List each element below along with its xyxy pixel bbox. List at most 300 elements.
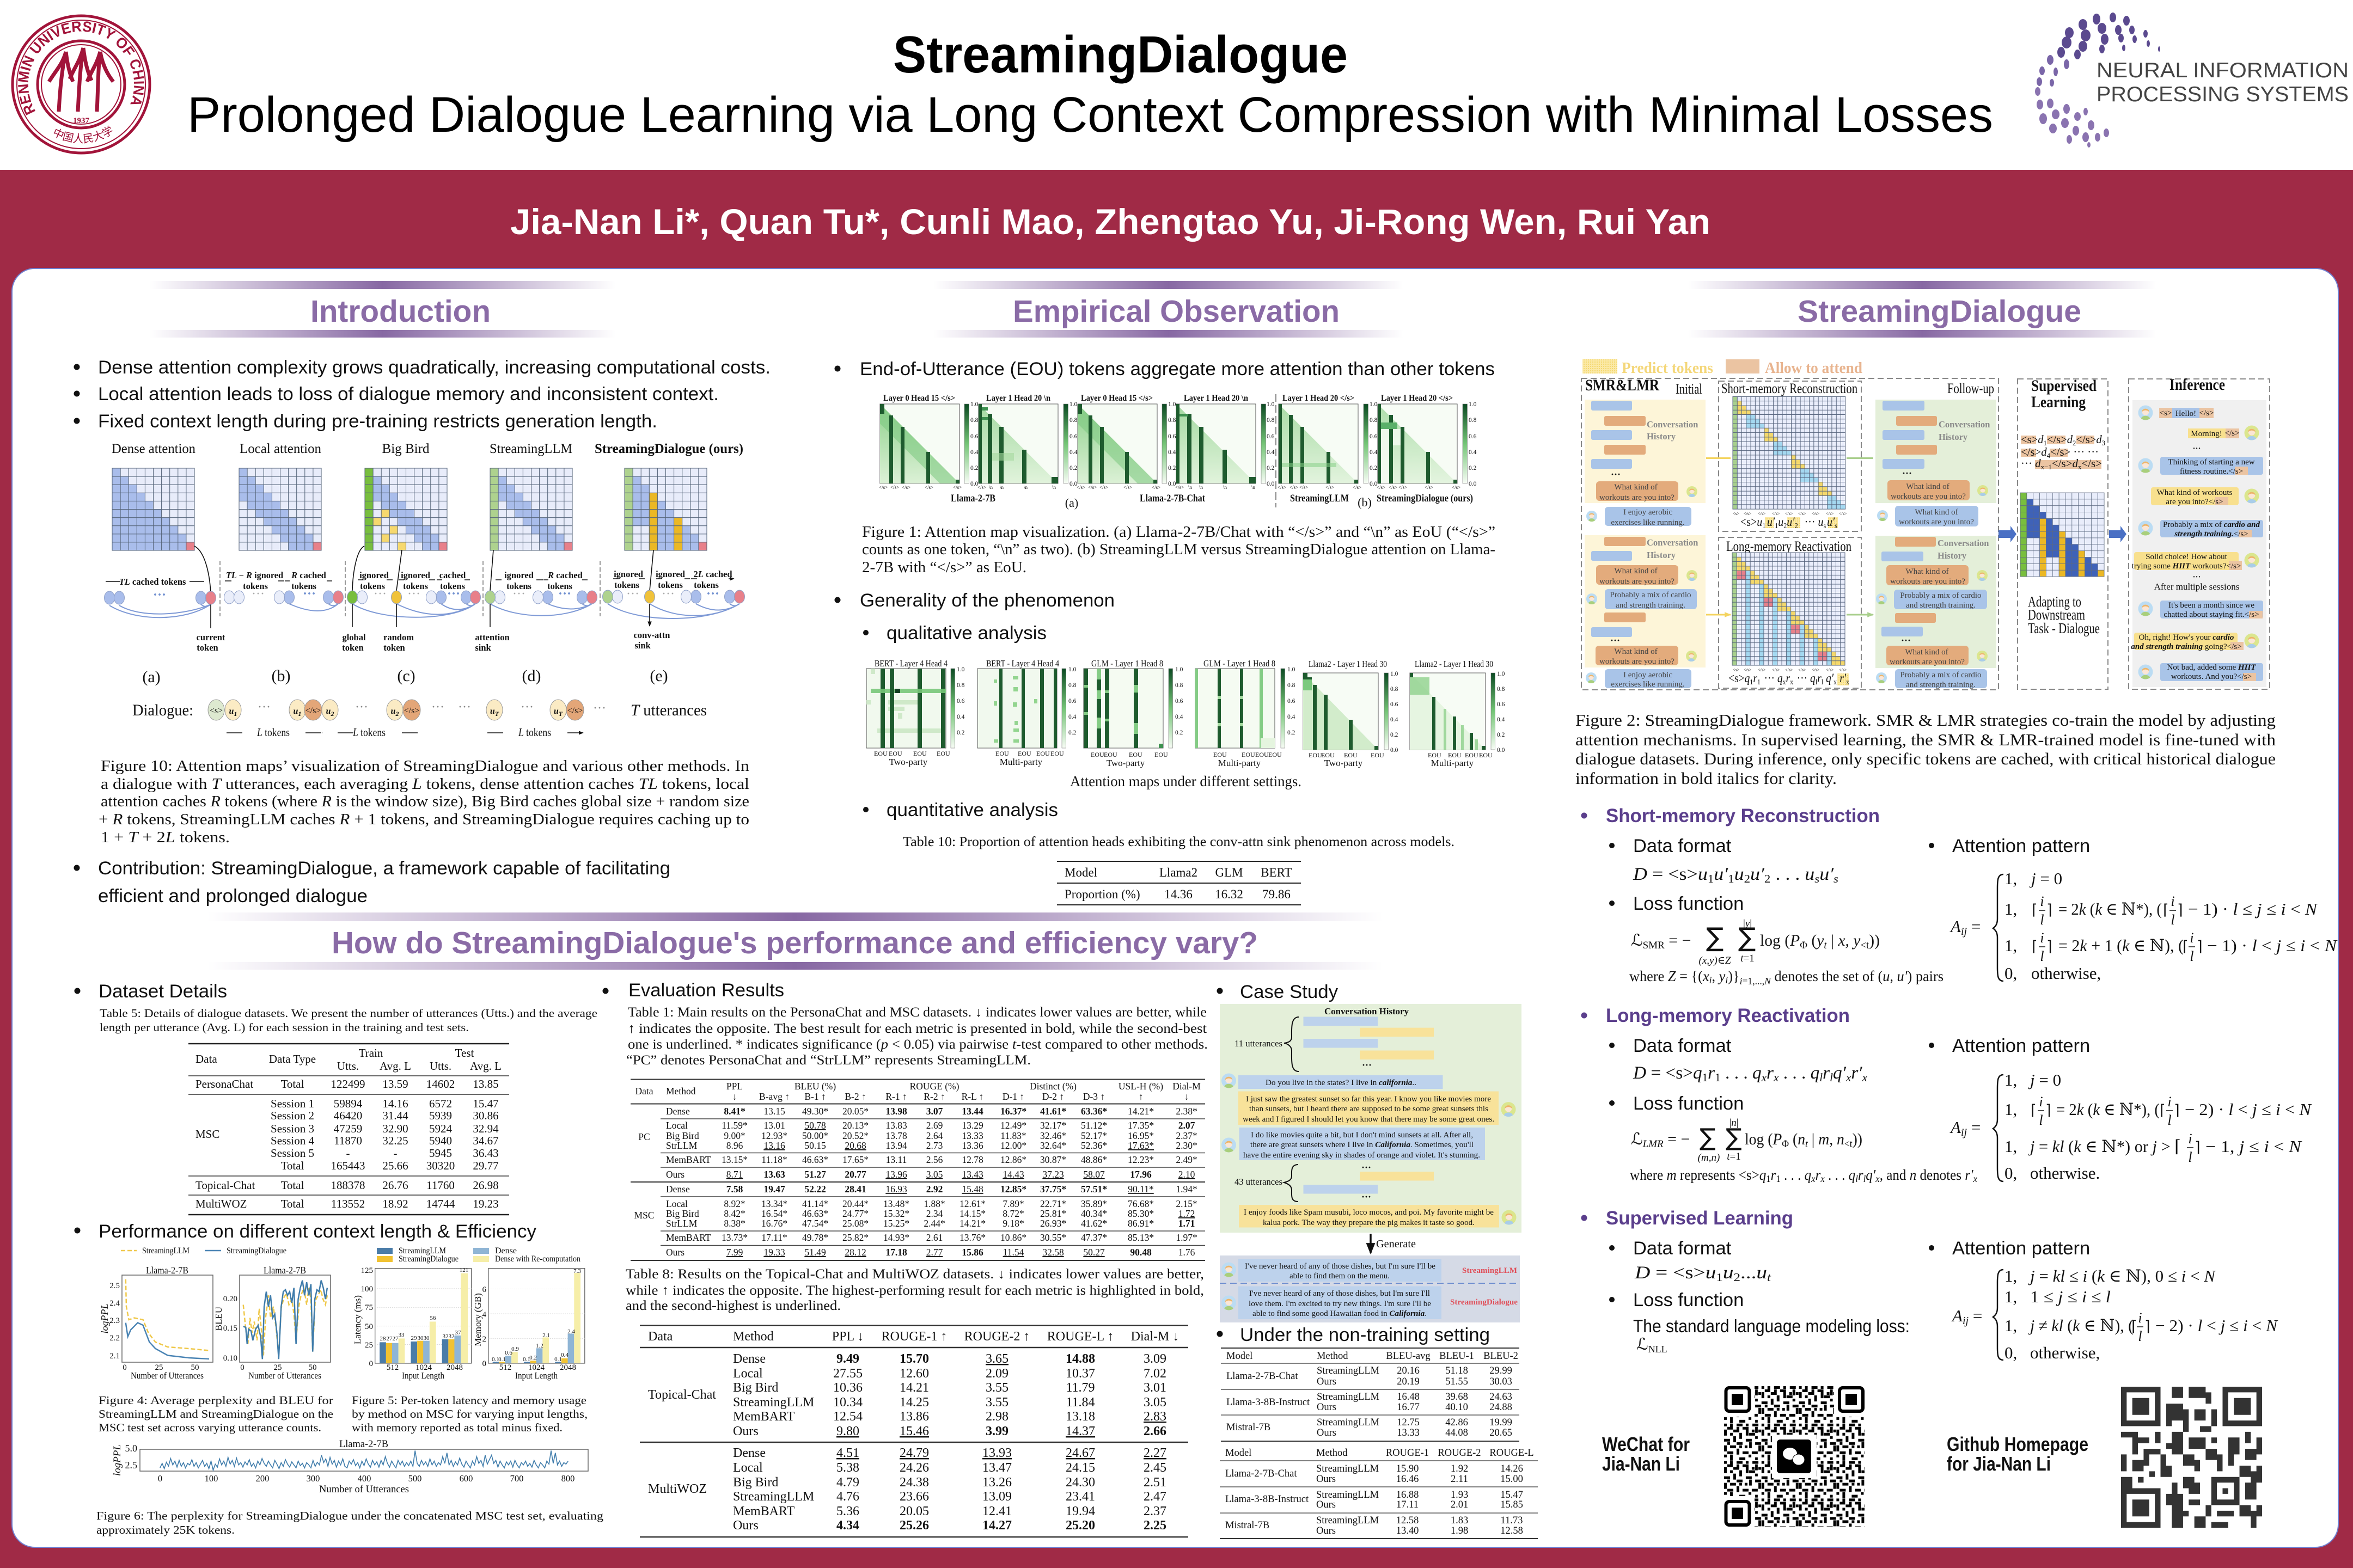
table 10: Table 10: Proportion of attention heads exhibiting the conv-attn sink phenomenon across models. bbox=[903, 835, 1454, 849]
colorbar ticks: 0.0 bbox=[970, 481, 979, 487]
bar chart: memory: 0.1 bbox=[554, 1356, 562, 1363]
EOU tick labels: \n bbox=[1052, 485, 1056, 490]
section: supervised learning bbox=[1581, 1208, 2278, 1362]
follow-up history panels: workouts are you into? bbox=[1891, 492, 1966, 501]
token labels: tokens bbox=[243, 581, 268, 591]
conversation history panel: there are great sunsets where I live in California. Sometimes, you'll bbox=[1250, 1141, 1474, 1149]
colorbar ticks: 0.4 bbox=[1168, 449, 1176, 456]
bullet: generality: qualitative analysis bbox=[887, 623, 1047, 644]
dialogue row: </s> bbox=[404, 706, 419, 715]
table 1: 51.27 bbox=[804, 1169, 826, 1180]
line chart: logPPL: 25 bbox=[155, 1363, 163, 1372]
dialogue row: ··· bbox=[355, 700, 368, 714]
table 1: 12.61* bbox=[959, 1198, 986, 1209]
table 8: 4.51 bbox=[836, 1446, 859, 1460]
colorbar ticks: 0.0 bbox=[1497, 747, 1505, 754]
table 1: 8.41* bbox=[724, 1106, 745, 1117]
attention arcs bbox=[109, 604, 739, 618]
colorbars bbox=[964, 404, 1467, 483]
conversation history panel: have the entire evening sky in shades of orange and violet. It's stunning. bbox=[1243, 1151, 1480, 1160]
table 1: D-1 ↑ bbox=[1003, 1091, 1024, 1102]
table 8 caption: Table 8: Results on the Topical-Chat and MultiWOZ datasets. ↓ indicates lower values are better, bbox=[626, 1267, 1204, 1282]
legend: Predict tokens bbox=[1622, 359, 1713, 377]
colorbar ticks: 0.2 bbox=[1069, 465, 1078, 471]
SMR loss formula: ∑ bbox=[1738, 922, 1756, 953]
ROUGE table: 15.47 bbox=[1500, 1490, 1523, 1500]
dialogue row: 1 bbox=[234, 710, 237, 718]
section: short-memory reconstruction: 1 bbox=[1708, 872, 1714, 885]
LMR attention pattern: i bbox=[2188, 1131, 2192, 1147]
table 5: 165443 bbox=[331, 1159, 365, 1172]
table 1: 13.29 bbox=[962, 1120, 983, 1131]
supervised learning panel: 2 bbox=[2073, 439, 2076, 447]
ROUGE table: Ours bbox=[1316, 1499, 1336, 1510]
token labels: sink bbox=[634, 640, 651, 651]
table 1: D-3 ↑ bbox=[1083, 1091, 1105, 1102]
bar chart: memory: 1024 bbox=[528, 1363, 545, 1372]
heatmap titles: Layer 0 Head 15 </s> bbox=[1081, 394, 1153, 403]
table 1: Dial-M bbox=[1172, 1081, 1201, 1092]
SMR attention pattern: − 1) · l < j ≤ i < N bbox=[2207, 936, 2338, 955]
table 10: Model bbox=[1065, 866, 1097, 879]
supervised attention pattern: i bbox=[2138, 1310, 2142, 1326]
follow-up history panels: Probably a mix of cardio bbox=[1900, 671, 1982, 679]
figure 1 sublabels: StreamingDialogue (ours) bbox=[1377, 493, 1473, 504]
line chart: perplexity over 800 utterances: 300 bbox=[307, 1473, 320, 1484]
table 1: 13.83 bbox=[885, 1120, 907, 1131]
short-memory reconstruction grid: </s> bbox=[1826, 511, 1834, 516]
colorbar ticks: 0.4 bbox=[1287, 714, 1295, 720]
bar chart: memory: 6 bbox=[482, 1285, 487, 1294]
ROUGE table: StreamingLLM bbox=[1316, 1463, 1379, 1474]
table 1: 1.94* bbox=[1176, 1184, 1197, 1195]
EOU tick labels: </s> bbox=[1425, 485, 1433, 490]
section: long-memory reactivation: l bbox=[1819, 1071, 1823, 1084]
table 1: 13.48* bbox=[883, 1198, 909, 1209]
colorbar ticks: 0.0 bbox=[1267, 481, 1275, 487]
long-memory reactivation grid: x bbox=[1783, 678, 1786, 687]
LMR attention pattern: l bbox=[2039, 1112, 2043, 1128]
LMR loss formula: (m,n) bbox=[1698, 1152, 1720, 1163]
table 1: MemBART bbox=[666, 1154, 711, 1165]
ROUGE table: 2.11 bbox=[1451, 1474, 1468, 1485]
BLEU table: 13.33 bbox=[1397, 1428, 1420, 1438]
table 1: 2.44* bbox=[924, 1218, 945, 1229]
EOU labels: EOU bbox=[1036, 750, 1050, 757]
long-memory reactivation grid: ··· bbox=[1794, 671, 1810, 685]
table 8: 14.21 bbox=[900, 1381, 929, 1395]
table 1: 2.77 bbox=[926, 1247, 943, 1258]
bar chart: memory: 0.1 bbox=[492, 1356, 499, 1363]
token labels bbox=[119, 569, 732, 653]
table 1: Dense bbox=[666, 1184, 690, 1195]
party labels: Two-party bbox=[889, 757, 928, 767]
table 1: Local bbox=[666, 1198, 688, 1209]
supervised learning panel: x bbox=[2078, 463, 2082, 471]
BLEU table: Llama-3-8B-Instruct bbox=[1226, 1397, 1310, 1408]
table 1: 20.13* bbox=[842, 1120, 869, 1131]
legend: figure 4: StreamingDialogue bbox=[227, 1246, 286, 1255]
SMR loss formula: <t bbox=[1860, 940, 1869, 951]
token dots bbox=[153, 587, 719, 602]
NeurIPS logo: PROCESSING SYSTEMS bbox=[2097, 83, 2349, 106]
section: short-memory reconstruction: Short-memory Reconstruction bbox=[1606, 805, 1880, 826]
conversation history panel: Do you live in the states? I live in california.. bbox=[1266, 1079, 1416, 1087]
token dots: ··· bbox=[626, 587, 639, 601]
table 5: 26.76 bbox=[382, 1179, 408, 1192]
colorbar ticks: 1.0 bbox=[1497, 671, 1505, 677]
EOU labels: EOU bbox=[1018, 750, 1031, 757]
ROUGE table: Mistral-7B bbox=[1225, 1520, 1269, 1531]
bar chart: latency: Latency (ms) bbox=[352, 1295, 363, 1344]
short-memory reconstruction grid: </s> bbox=[1798, 511, 1806, 516]
line chart: logPPL: Number of Utterances bbox=[131, 1370, 204, 1381]
EOU labels: EOU bbox=[1104, 751, 1117, 758]
initial history panels bbox=[1585, 400, 1706, 689]
supervised learning panel: Adapting to bbox=[2028, 593, 2081, 610]
short-memory reconstruction grid: 1 bbox=[1762, 522, 1765, 530]
line chart: perplexity over 800 utterances: 200 bbox=[256, 1473, 269, 1484]
grid e bbox=[625, 468, 707, 550]
table 5: 29.77 bbox=[473, 1159, 499, 1172]
table 1: 16.76* bbox=[761, 1218, 787, 1229]
SMR attention pattern: l bbox=[2040, 948, 2044, 964]
table 1: 13.98 bbox=[885, 1106, 907, 1117]
line chart: BLEU: BLEU bbox=[213, 1307, 224, 1331]
colorbar ticks: 0.8 bbox=[1175, 682, 1183, 689]
table 1 bbox=[631, 1079, 1205, 1260]
table 1: 2.56 bbox=[926, 1154, 943, 1165]
SMR attention pattern: i bbox=[2190, 930, 2194, 946]
table 5: Session 2 bbox=[271, 1109, 314, 1122]
table 10: 79.86 bbox=[1262, 887, 1291, 901]
section: short-memory reconstruction: 2 bbox=[1764, 872, 1770, 885]
caption: figure 4 bbox=[99, 1394, 333, 1434]
colorbar ticks bbox=[970, 401, 1477, 487]
bar chart: memory: 0.1 bbox=[498, 1356, 506, 1363]
table 8: 3.09 bbox=[1144, 1352, 1166, 1366]
long-memory reactivation grid: x bbox=[1846, 678, 1849, 687]
table 1: 20.77 bbox=[845, 1169, 866, 1180]
section: supervised learning: Attention pattern bbox=[1952, 1238, 2090, 1259]
table 1: 32.58 bbox=[1042, 1247, 1064, 1258]
dialogue row: 2 bbox=[395, 710, 399, 718]
table 5: Total bbox=[281, 1179, 304, 1192]
heading: StreamingDialogue bbox=[1688, 281, 2156, 338]
frame headings: Follow-up bbox=[1947, 381, 1994, 396]
line chart: perplexity over 800 utterances: 600 bbox=[460, 1473, 473, 1484]
SMR loss formula: )) bbox=[1869, 932, 1880, 950]
section: long-memory reactivation: l bbox=[1863, 1173, 1866, 1184]
BLEU table: Method bbox=[1317, 1351, 1348, 1362]
LMR loss formula: )) bbox=[1853, 1130, 1862, 1148]
inference panel bbox=[2131, 376, 2266, 687]
EOU tick labels: \n bbox=[1251, 485, 1256, 490]
follow-up history panels: What kind of bbox=[1905, 567, 1949, 576]
table 8: ROUGE-1 ↑ bbox=[882, 1330, 947, 1344]
supervised attention pattern: A bbox=[1951, 1306, 1963, 1325]
table 8: 2.27 bbox=[1144, 1446, 1166, 1460]
frame headings: SMR&LMR bbox=[1585, 376, 1659, 394]
bar chart: memory: 2.1 bbox=[542, 1332, 550, 1339]
table 1: 20.68 bbox=[845, 1140, 866, 1151]
colorbar ticks: 0.2 bbox=[1068, 730, 1077, 736]
EOU tick labels: </s> bbox=[1099, 485, 1108, 490]
bar chart: latency: 75 bbox=[365, 1303, 373, 1312]
BLEU table: 24.63 bbox=[1489, 1392, 1512, 1402]
Github label bbox=[1947, 1433, 2088, 1475]
EOU labels: EOU bbox=[1479, 751, 1493, 759]
table 1: B-2 ↑ bbox=[845, 1091, 866, 1102]
table 1: 16.54* bbox=[761, 1208, 787, 1219]
EOU labels: EOU bbox=[1309, 751, 1322, 759]
colorbar ticks: 0.4 bbox=[1497, 716, 1505, 723]
colorbar ticks: 0.8 bbox=[1068, 682, 1077, 689]
EOU labels: EOU bbox=[1448, 751, 1462, 759]
initial history panels: I enjoy aerobic bbox=[1623, 671, 1672, 679]
Llama2 two-party bbox=[1303, 673, 1378, 750]
colorbar ticks: 0.8 bbox=[1469, 417, 1477, 424]
SMR attention pattern: = 2k + 1 (k ∈ ℕ), ( bbox=[2058, 936, 2184, 955]
figure 1 sublabels: StreamingLLM bbox=[1290, 493, 1349, 504]
separators bbox=[220, 561, 600, 616]
caption: figure 4: Figure 4: Average perplexity and BLEU for bbox=[99, 1394, 333, 1407]
BLEU table: 16.77 bbox=[1397, 1402, 1420, 1413]
table 10: BERT bbox=[1261, 866, 1292, 879]
short-memory reconstruction grid: u′ bbox=[1827, 515, 1835, 529]
follow-up history panels: What kind of bbox=[1906, 482, 1949, 491]
section: supervised learning: D = <s> u bbox=[1635, 1263, 1714, 1283]
table 8: 11.79 bbox=[1066, 1381, 1095, 1395]
EOU labels: EOU bbox=[1255, 751, 1269, 758]
line chart: logPPL: logPPL bbox=[99, 1303, 110, 1334]
table 5: Total bbox=[281, 1077, 304, 1091]
ROUGE table: 15.00 bbox=[1500, 1474, 1523, 1485]
section: long-memory reactivation: x bbox=[1845, 1071, 1851, 1084]
colorbars bbox=[951, 669, 1495, 750]
dialogue row: ··· bbox=[521, 700, 534, 714]
ROUGE table: 12.58 bbox=[1396, 1515, 1419, 1526]
table 1: Method bbox=[666, 1086, 696, 1097]
BLEU table: Ours bbox=[1317, 1428, 1336, 1438]
short-memory reconstruction grid: </s> bbox=[1772, 511, 1780, 516]
line chart: BLEU: Number of Utterances bbox=[248, 1370, 321, 1381]
LMR attention pattern: 1, bbox=[2004, 1100, 2017, 1119]
section: long-memory reactivation: x bbox=[1811, 1173, 1816, 1184]
table 1: 16.93 bbox=[885, 1184, 907, 1195]
EOU tick labels: </s> bbox=[879, 485, 888, 490]
LMR loss formula: <t bbox=[1844, 1138, 1853, 1150]
line chart: BLEU: 0.20 bbox=[223, 1295, 237, 1303]
bar chart: latency: 0 bbox=[369, 1359, 373, 1368]
dialogue row: 2 bbox=[330, 710, 334, 718]
EOU tick labels: \n bbox=[1000, 485, 1004, 490]
line chart: logPPL: 2.5 bbox=[109, 1282, 120, 1290]
SMR attention pattern: i bbox=[2171, 893, 2175, 909]
long-memory reactivation grid: </s> bbox=[1839, 667, 1847, 672]
follow-up history panels: ··· bbox=[1901, 635, 1911, 646]
EOU tick labels: </s> bbox=[1289, 485, 1298, 490]
EOU tick labels: </s> bbox=[902, 485, 910, 490]
method labels bbox=[112, 442, 743, 456]
table 1: 63.36* bbox=[1081, 1106, 1107, 1117]
table 1: 15.32* bbox=[883, 1208, 909, 1219]
generated responses panel: love them. I'm excited to try new things. I'm sure I'll be bbox=[1249, 1300, 1431, 1308]
case labels: (b) bbox=[272, 667, 290, 685]
short-memory reconstruction grid: 2 bbox=[1783, 522, 1787, 530]
heatmap d bbox=[1176, 404, 1256, 483]
token labels: tokens bbox=[440, 581, 465, 591]
colorbar ticks: 1.0 bbox=[1175, 666, 1183, 673]
table 8: 5.38 bbox=[836, 1461, 859, 1475]
party labels: Two-party bbox=[1324, 758, 1363, 768]
bar chart: latency: 37 bbox=[455, 1330, 461, 1336]
table 5: 13.59 bbox=[382, 1077, 408, 1091]
table 1: 28.12 bbox=[845, 1247, 866, 1258]
table 1: 48.86* bbox=[1081, 1154, 1107, 1165]
section: supervised learning: Data format bbox=[1633, 1238, 1732, 1259]
table 8: 13.09 bbox=[982, 1490, 1012, 1504]
supervised learning panel: <s>d bbox=[2021, 433, 2044, 446]
table 1: 12.49* bbox=[1000, 1120, 1026, 1131]
table 1: 15.86 bbox=[962, 1247, 983, 1258]
colorbar ticks: 0.8 bbox=[1069, 417, 1078, 424]
long-memory reactivation grid: l bbox=[1822, 678, 1823, 687]
inference bubbles: <s> bbox=[2160, 409, 2172, 418]
colorbar ticks: 0.8 bbox=[970, 417, 979, 424]
heatmap titles: Layer 1 Head 20 </s> bbox=[1381, 394, 1453, 403]
LMR loss formula: | bbox=[1808, 1130, 1818, 1148]
line chart: perplexity over 800 utterances: Number of Utterances bbox=[319, 1484, 409, 1495]
table 1: 13.76* bbox=[959, 1232, 986, 1243]
dialogue row: L tokens bbox=[352, 726, 386, 739]
bar chart: latency: 1024 bbox=[415, 1363, 432, 1372]
table 8: Dense bbox=[733, 1446, 766, 1460]
token labels: tokens bbox=[403, 581, 428, 591]
SMR loss formula: log (P bbox=[1760, 932, 1800, 950]
dialogue row: u bbox=[391, 707, 395, 716]
dialogue row: Dialogue: bbox=[132, 701, 193, 719]
short-memory reconstruction grid bbox=[1733, 396, 1847, 530]
panel: introduction bullets: Fixed context length during pre-training restricts generation length. bbox=[98, 411, 657, 432]
dialogue row: <s> bbox=[210, 706, 223, 715]
ROUGE table: 2.01 bbox=[1451, 1499, 1468, 1510]
line chart: perplexity over 800 utterances: 500 bbox=[408, 1473, 421, 1484]
table 5: Data Type bbox=[269, 1052, 316, 1065]
table 1: 16.37* bbox=[1000, 1106, 1026, 1117]
line chart: perplexity over 800 utterances: 2.5 bbox=[125, 1460, 137, 1471]
token labels: TL cached tokens bbox=[119, 577, 186, 587]
section: short-memory reconstruction: u, u′) pairs bbox=[1883, 968, 1945, 984]
table 1: 15.48 bbox=[962, 1184, 983, 1195]
table 1: 2.15* bbox=[1176, 1198, 1197, 1209]
caption: figure 10 bbox=[99, 757, 750, 846]
dialogue row: 1 bbox=[298, 710, 301, 718]
table 8: 3.55 bbox=[986, 1381, 1009, 1395]
bar chart: memory: 0.6 bbox=[505, 1350, 512, 1356]
table 1: 14.21* bbox=[1128, 1106, 1154, 1117]
EOU labels: EOU bbox=[874, 750, 888, 757]
bar chart: latency: 30 bbox=[417, 1335, 424, 1342]
bar chart: latency: 29 bbox=[411, 1335, 417, 1342]
supervised learning panel: </s> bbox=[2081, 457, 2102, 470]
supervised attention pattern: l bbox=[2138, 1328, 2142, 1344]
long-memory reactivation grid: ··· bbox=[1762, 671, 1777, 685]
table 1: 7.99 bbox=[726, 1247, 743, 1258]
inference panel: Inference bbox=[2169, 376, 2225, 394]
table 8: 2.51 bbox=[1144, 1475, 1166, 1490]
section: long-memory reactivation: q bbox=[1805, 1167, 1811, 1183]
table 5: 30320 bbox=[426, 1159, 455, 1172]
heatmap c bbox=[1078, 404, 1157, 483]
line chart: BLEU: 0.15 bbox=[223, 1324, 237, 1333]
LMR attention pattern: i bbox=[2167, 1094, 2172, 1110]
table 8: 3.99 bbox=[986, 1424, 1009, 1438]
EOU labels: EOU bbox=[1242, 751, 1255, 758]
table 1: StrLLM bbox=[666, 1140, 698, 1151]
generated responses panel bbox=[1220, 1255, 1520, 1322]
table 1: 20.52* bbox=[842, 1130, 869, 1141]
EOU labels: EOU bbox=[1371, 751, 1384, 759]
legend bbox=[1582, 359, 1862, 377]
table 10: GLM bbox=[1215, 866, 1243, 879]
EOU tick labels: \n bbox=[1199, 485, 1203, 490]
follow-up history panels: ··· bbox=[1902, 468, 1912, 479]
section: short-memory reconstruction: u bbox=[1805, 865, 1814, 884]
token labels: token bbox=[197, 642, 218, 653]
table 5: Utts. bbox=[430, 1059, 451, 1073]
section: long-memory reactivation: x bbox=[1973, 1173, 1977, 1184]
table 1: Data bbox=[635, 1086, 653, 1097]
table 1: BLEU (%) bbox=[794, 1081, 836, 1092]
inference bubbles bbox=[2131, 405, 2263, 681]
table 8: 4.76 bbox=[836, 1490, 859, 1504]
heatmap titles: Layer 1 Head 20 \n bbox=[986, 394, 1050, 403]
table 1: 3.05 bbox=[926, 1169, 943, 1180]
token labels: sink bbox=[475, 642, 492, 653]
follow-up history panels: workouts are you into? bbox=[1890, 658, 1965, 666]
line chart: logPPL: 2.1 bbox=[109, 1352, 120, 1361]
section: long-memory reactivation: r bbox=[1858, 1167, 1863, 1183]
bar chart: latency bbox=[352, 1266, 472, 1381]
EOU labels: EOU bbox=[937, 750, 950, 757]
table 1: 49.78* bbox=[802, 1232, 828, 1243]
initial history panels: exercises like running. bbox=[1611, 680, 1685, 689]
token labels: R cached bbox=[547, 570, 583, 580]
table 1: 1.88* bbox=[924, 1198, 945, 1209]
table 8: Big Bird bbox=[733, 1475, 778, 1490]
table 8: 23.41 bbox=[1066, 1490, 1095, 1504]
section: supervised learning: 2 bbox=[1733, 1271, 1740, 1284]
dialogue row: u bbox=[490, 707, 495, 716]
table 1: 2.69 bbox=[926, 1120, 943, 1131]
supervised learning panel: 1 bbox=[2043, 439, 2047, 447]
token labels: ignored bbox=[614, 569, 643, 579]
table 5: - bbox=[346, 1147, 350, 1160]
dialogue row bbox=[132, 700, 707, 739]
LMR loss formula: t=1 bbox=[1727, 1151, 1741, 1162]
table 5: 13.85 bbox=[473, 1077, 499, 1091]
figure 1 sublabels bbox=[951, 493, 1473, 510]
initial history panels: What kind of bbox=[1614, 483, 1658, 492]
table 8: 2.37 bbox=[1144, 1504, 1166, 1518]
line chart: perplexity over 800 utterances: 100 bbox=[205, 1473, 218, 1484]
initial history panels: ··· bbox=[1610, 635, 1620, 646]
dialogue row: u bbox=[326, 707, 331, 716]
EOU labels: EOU bbox=[1154, 751, 1168, 758]
bar chart: latency: 27 bbox=[392, 1336, 399, 1342]
table 1: 25.08* bbox=[842, 1218, 869, 1229]
